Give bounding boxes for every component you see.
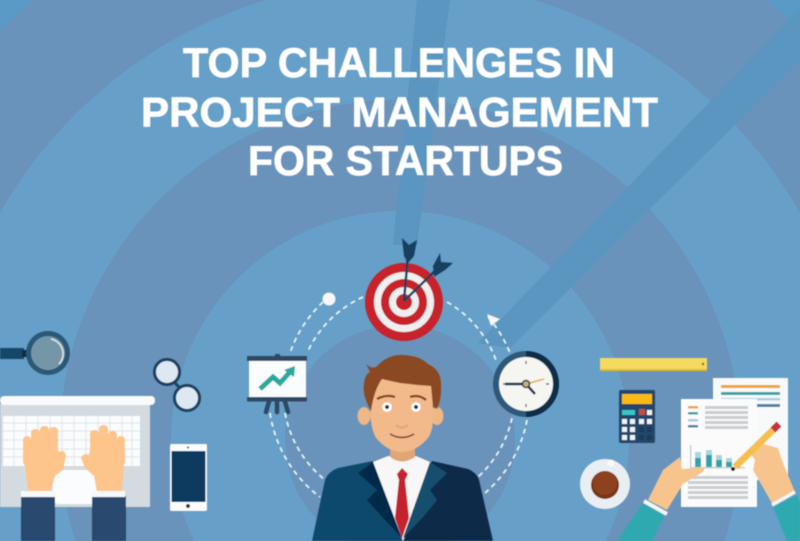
icon: laptop — [0, 396, 155, 507]
writing hands and sleeves — [617, 443, 800, 541]
dashed cycle arcs — [270, 297, 527, 497]
eyebrows — [377, 396, 426, 400]
arrowhead marker — [487, 314, 500, 326]
icon: target with arrows — [365, 238, 453, 341]
back document — [713, 378, 788, 480]
keyboard — [3, 416, 140, 504]
illustration — [0, 238, 800, 541]
nose — [396, 425, 408, 428]
suit jacket — [312, 461, 403, 541]
shirt — [373, 456, 430, 541]
right hand — [750, 443, 795, 505]
left sleeve — [617, 503, 665, 541]
eyes — [382, 402, 421, 412]
right sleeve — [773, 495, 800, 541]
icon: pencil — [731, 424, 779, 471]
left hand — [648, 457, 705, 510]
hands on keyboard — [23, 425, 125, 492]
mouth — [390, 434, 414, 438]
sleeves — [21, 491, 126, 541]
dot marker — [322, 292, 336, 306]
man in suit — [312, 355, 493, 541]
ears — [358, 407, 370, 425]
title: FOR STARTUPS — [248, 137, 563, 184]
icon: glasses — [154, 360, 200, 410]
icon: calculator — [619, 390, 655, 443]
icon: smartphone — [170, 444, 207, 511]
icon: clock — [493, 351, 559, 417]
neck — [390, 440, 415, 462]
title — [141, 39, 658, 184]
icon: presentation board — [247, 354, 307, 412]
front document with chart — [681, 399, 757, 507]
face — [370, 375, 433, 452]
title: PROJECT MANAGEMENT — [141, 88, 658, 136]
lapels — [358, 462, 402, 538]
icon: magnifying glass — [0, 331, 70, 375]
icon: coffee cup — [580, 459, 630, 509]
title: TOP CHALLENGES IN — [183, 39, 615, 86]
hair — [364, 355, 441, 411]
icon: ruler — [600, 358, 707, 371]
tie — [395, 468, 409, 538]
